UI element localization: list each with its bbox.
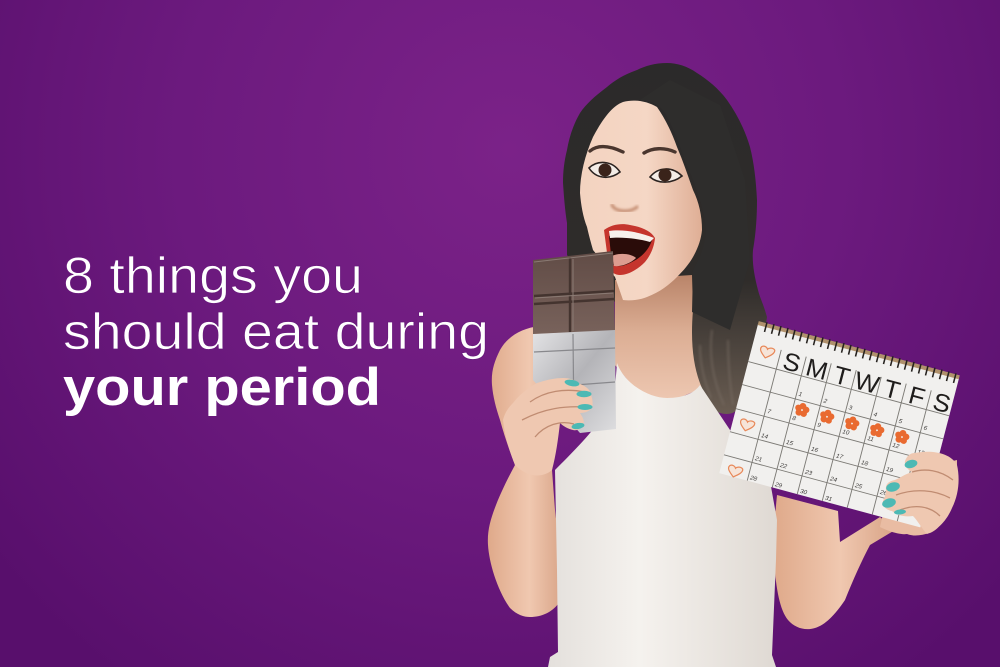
- nose shadow: [612, 205, 637, 211]
- dates: 21: [753, 455, 763, 464]
- title: should eat during: [63, 303, 489, 360]
- fingernails: [564, 379, 592, 430]
- heart doodles: [727, 345, 775, 479]
- dates: 15: [785, 439, 794, 448]
- face: [580, 101, 702, 300]
- weekday headers: [780, 348, 954, 419]
- arm: left upper arm and shoulder: [488, 326, 563, 617]
- flower stickers: [793, 401, 911, 445]
- left hand: [503, 378, 593, 475]
- dates: 13: [917, 449, 926, 457]
- arm: right: [774, 495, 895, 629]
- eyebrows: [590, 147, 675, 153]
- weekday headers: S: [780, 348, 804, 379]
- hair back: [563, 63, 767, 414]
- title: 8 things you: [63, 247, 363, 304]
- right hand fingers: [881, 452, 959, 534]
- chocolate bar: [533, 251, 616, 433]
- dates: 20: [909, 472, 919, 481]
- calendar: [719, 320, 960, 527]
- dates: 8: [792, 415, 797, 423]
- dates: 9: [817, 422, 822, 429]
- dates: 25: [853, 482, 863, 491]
- white tank top: [548, 363, 777, 667]
- spiral binding: [764, 322, 956, 383]
- weekday headers: M: [803, 354, 831, 386]
- dates: 11: [867, 435, 874, 443]
- mouth: [604, 224, 655, 275]
- dates: 7: [767, 408, 772, 416]
- dates: 23: [803, 469, 813, 477]
- dates: 12: [892, 442, 901, 451]
- dates: 1: [798, 391, 803, 398]
- title: [63, 247, 489, 417]
- dates: 10: [842, 428, 851, 437]
- fingernails: [881, 458, 918, 515]
- dates: 30: [799, 488, 808, 497]
- dates: 3: [848, 404, 853, 412]
- weekday headers: T: [831, 361, 853, 392]
- dates: 16: [810, 446, 819, 454]
- weekday headers: T: [881, 375, 903, 405]
- woman: [488, 63, 960, 667]
- calendar page: [719, 324, 959, 527]
- dates: 2: [822, 397, 828, 405]
- weekday headers: F: [906, 382, 928, 412]
- dates: 17: [835, 452, 844, 461]
- title: your period: [63, 358, 381, 417]
- dates: 19: [885, 466, 894, 475]
- dates: 14: [760, 432, 769, 441]
- dates: 18: [860, 459, 869, 468]
- eyes: [589, 162, 682, 182]
- dates: 6: [923, 425, 928, 432]
- hair lighter strands: [700, 330, 733, 405]
- weekday headers: W: [851, 367, 882, 400]
- right hand palm: [880, 460, 957, 536]
- foil wrapper: [533, 329, 616, 433]
- dates: 29: [773, 481, 783, 490]
- hair front strand: [640, 80, 750, 330]
- dates: 28: [748, 474, 758, 483]
- dates: [748, 384, 932, 524]
- chocolate: [533, 251, 615, 334]
- calendar grid: [719, 342, 954, 527]
- dates: 5: [898, 418, 903, 426]
- dates: 24: [828, 475, 838, 484]
- dates: 31: [824, 495, 833, 503]
- dates: 22: [778, 462, 788, 471]
- neck and chest: [615, 275, 702, 402]
- dates: 26: [878, 489, 888, 498]
- weekday headers: S: [930, 388, 954, 419]
- dates: 4: [873, 411, 878, 419]
